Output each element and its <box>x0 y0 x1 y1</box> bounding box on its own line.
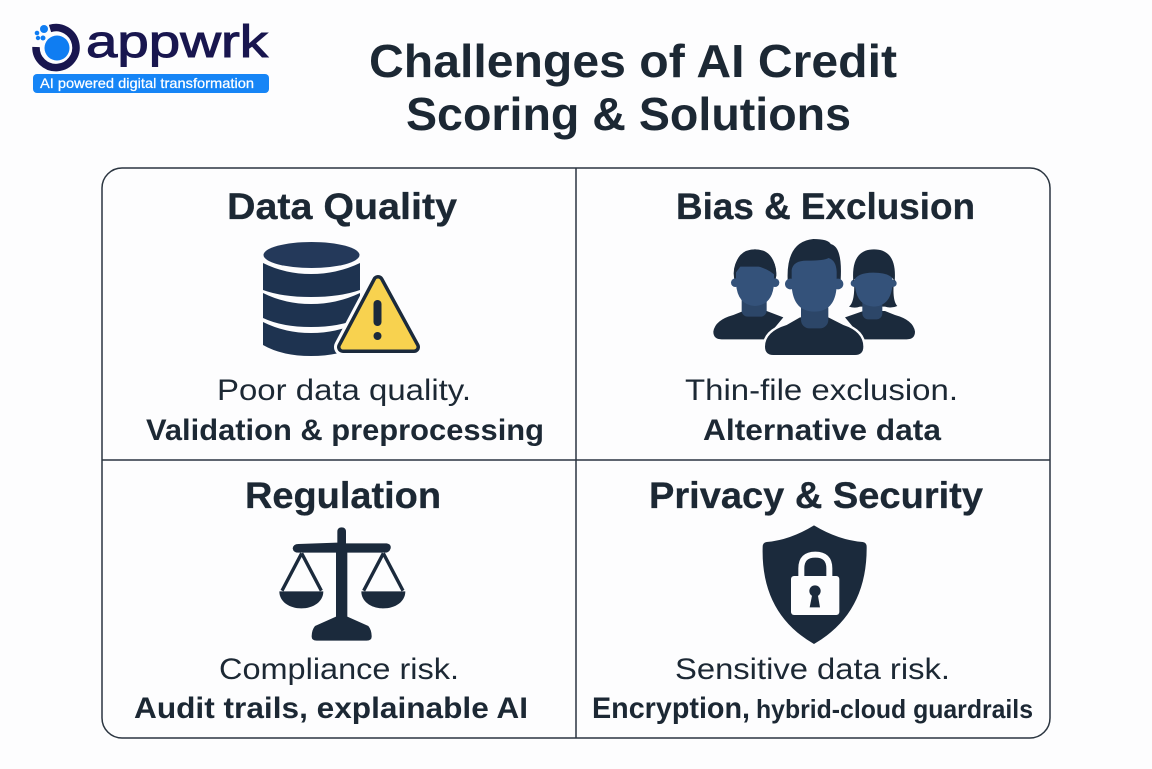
text: problem and solution: Alternative data <box>703 414 941 447</box>
text: problem and solution: Thin-file exclusion. <box>685 374 958 407</box>
icon: balance scale <box>279 527 405 641</box>
text: problem and solution <box>685 374 958 447</box>
grid frame <box>102 168 1050 738</box>
heading: data quality: Data Quality <box>227 186 457 227</box>
text: problem and solution: Audit trails, explainable AI <box>134 692 528 725</box>
text: problem and solution: Sensitive data risk. <box>675 653 950 686</box>
text: problem and solution: Validation & preprocessing <box>146 414 544 447</box>
heading: privacy and security: Privacy & Security <box>649 475 983 516</box>
panel: regulation <box>134 475 528 725</box>
icon: database with warning <box>263 242 414 356</box>
panel: bias and exclusion <box>676 186 975 447</box>
panel: data quality <box>146 186 544 447</box>
text: problem and solution: hybrid-cloud guardrails <box>756 694 1033 724</box>
title: Scoring & Solutions <box>406 88 851 140</box>
logo: appwrk: appwrk <box>86 16 269 67</box>
text: problem and solution: Poor data quality. <box>217 374 471 407</box>
logo: appwrk <box>33 16 269 93</box>
icon: shield with padlock <box>763 525 867 644</box>
title <box>369 35 897 140</box>
text: problem and solution <box>134 653 528 725</box>
heading: regulation: Regulation <box>245 475 441 516</box>
icon: three people <box>713 239 915 355</box>
heading: bias and exclusion: Bias & Exclusion <box>676 186 975 227</box>
panel: privacy and security <box>592 475 1033 725</box>
text: problem and solution <box>592 653 1033 725</box>
text: problem and solution: Compliance risk. <box>219 653 459 686</box>
text: problem and solution: Encryption, <box>592 692 750 725</box>
text: problem and solution <box>146 374 544 447</box>
title: Challenges of AI Credit <box>369 35 897 87</box>
logo: appwrk: AI powered digital transformation <box>40 75 254 91</box>
